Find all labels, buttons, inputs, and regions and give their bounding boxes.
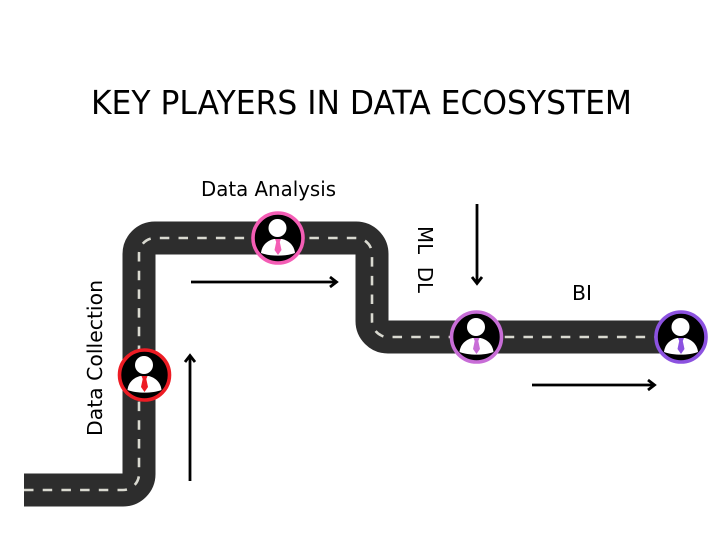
road xyxy=(24,238,680,490)
label: ML DL: ML DL xyxy=(413,226,437,294)
icon: person orchid xyxy=(452,312,502,362)
label: data analysis: Data Analysis xyxy=(201,177,336,201)
icon: person pink xyxy=(253,213,303,263)
arrow: up xyxy=(185,356,195,481)
title: KEY PLAYERS IN DATA ECOSYSTEM xyxy=(91,83,632,122)
arrow: right to analysis xyxy=(191,277,336,287)
label: data collection: Data Collection xyxy=(83,280,107,436)
arrow: right to BI xyxy=(532,380,654,390)
arrow: down xyxy=(472,204,482,284)
icon: person violet xyxy=(656,312,706,362)
icon: person red xyxy=(120,350,170,400)
label: BI: BI xyxy=(572,281,592,305)
